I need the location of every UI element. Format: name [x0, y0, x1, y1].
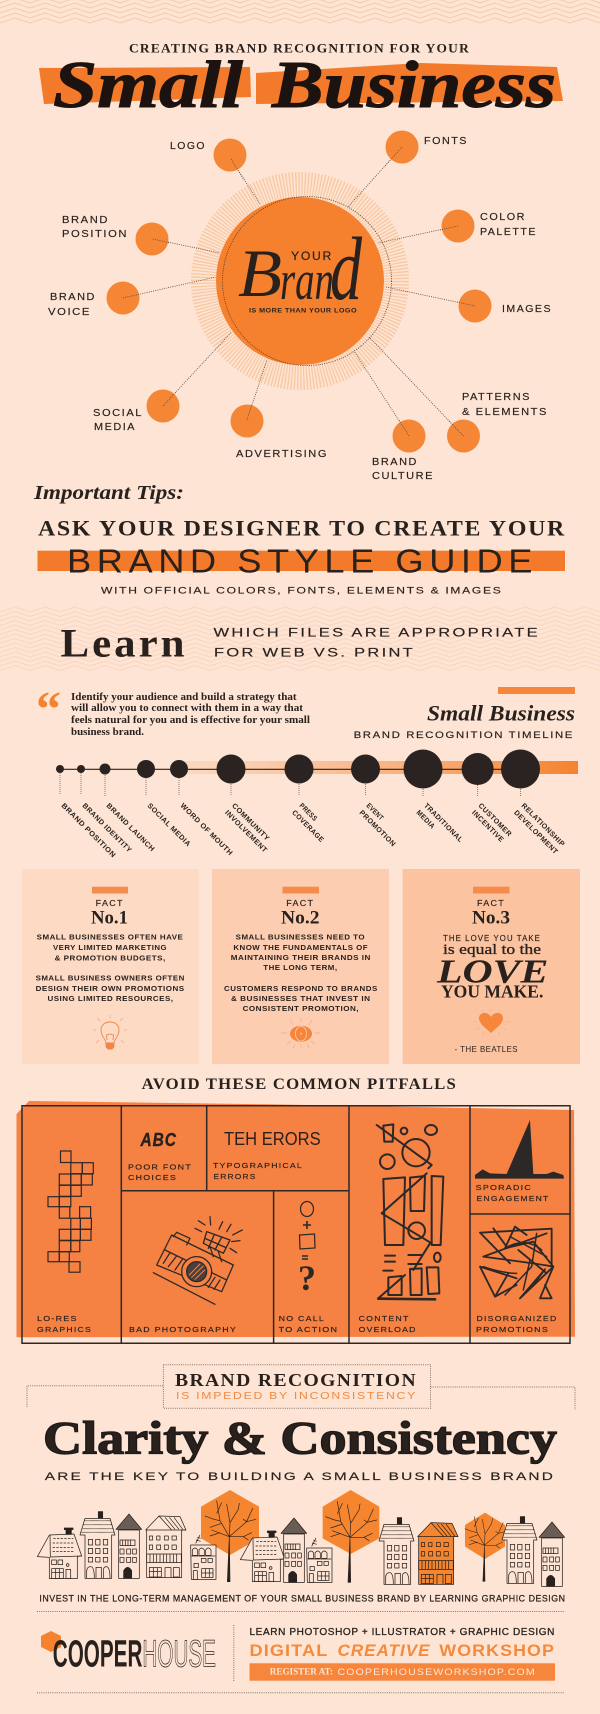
- hub heading brand: B: [238, 235, 282, 311]
- workshop title: CREATIVE: [338, 1641, 430, 1660]
- orange bar: [38, 551, 565, 571]
- accent bar: [498, 687, 575, 694]
- spoke labels: COLOR: [480, 212, 526, 223]
- hub heading your: YOUR: [291, 249, 333, 263]
- label: poor font: [128, 1162, 192, 1182]
- workshop title: DIGITAL: [250, 1641, 328, 1660]
- style guide tip: [38, 516, 566, 596]
- sunburst ring: [204, 184, 396, 378]
- label: disorganized: PROMOTIONS: [476, 1325, 549, 1334]
- label: content overload: OVERLOAD: [359, 1325, 417, 1334]
- fact body: & PROMOTION BUDGETS,: [55, 953, 166, 962]
- quote block: [36, 680, 310, 738]
- panel: fact 3: [403, 869, 580, 1064]
- panel: fact 1: [22, 869, 199, 1064]
- fact body: KNOW THE FUNDAMENTALS OF: [233, 943, 368, 952]
- icon: heart: [473, 1009, 509, 1035]
- learn callout: [60, 621, 540, 666]
- icon: camera: [153, 1217, 242, 1304]
- card background: [22, 869, 199, 1064]
- label: poor font: POOR FONT: [128, 1162, 192, 1171]
- label: bad photography: BAD PHOTOGRAPHY: [129, 1325, 237, 1334]
- quote paragraph: feels natural for you and is effective for your small: [71, 715, 310, 726]
- clarity subheading: ARE THE KEY TO BUILDING A SMALL BUSINESS BRAND: [45, 1471, 555, 1483]
- orange band: [185, 761, 578, 774]
- brand recognition timeline: [56, 750, 578, 859]
- orange house: [418, 1523, 458, 1584]
- icon: lo-res graphics: [48, 1151, 93, 1272]
- love quote: [436, 933, 548, 1002]
- label: lo-res: [37, 1314, 92, 1334]
- rotated milestone labels: MEDIA: [415, 808, 437, 831]
- label: poor font: CHOICES: [128, 1173, 177, 1182]
- central circle: [216, 197, 384, 365]
- logo wordmark house: HOUSE: [142, 1634, 216, 1676]
- label: typographical: [213, 1161, 303, 1181]
- rotated milestone labels: INVOLVEMENT: [223, 808, 270, 855]
- quote paragraph: will allow you to connect with them in a way that: [71, 703, 304, 714]
- quote attribution: - THE BEATLES: [455, 1044, 518, 1054]
- label: lo-res: LO-RES: [37, 1314, 78, 1323]
- rotated milestone labels: INCENTIVE: [470, 808, 506, 844]
- spoke labels: LOGO: [170, 141, 206, 152]
- quote paragraph: [71, 692, 310, 738]
- accent tab: [92, 887, 128, 894]
- drop lines: [60, 773, 520, 796]
- satellite circles: [106, 130, 492, 452]
- rotated milestone labels: BRAND LAUNCH: [105, 801, 157, 853]
- hub caption: IS MORE THAN YOUR LOGO: [249, 308, 357, 314]
- dotted frame: [27, 1365, 575, 1410]
- label: no call: NO CALL: [279, 1314, 325, 1323]
- register label: REGISTER AT:: [270, 1667, 333, 1677]
- pitfalls heading: AVOID THESE COMMON PITFALLS: [142, 1076, 457, 1093]
- title strip right: [256, 63, 563, 104]
- rotated milestone labels: WORD OF MOUTH: [179, 801, 235, 857]
- subtitle: CREATING BRAND RECOGNITION FOR YOUR: [129, 40, 470, 56]
- grid frame: [22, 1106, 570, 1343]
- love quote: THE LOVE YOU TAKE: [443, 933, 541, 943]
- important tips heading: Important Tips:: [33, 482, 184, 504]
- workshop promo: [250, 1626, 555, 1681]
- title text Small: Small: [53, 48, 243, 122]
- icon: disorganized tangle: [480, 1227, 553, 1298]
- axis line: [60, 768, 510, 770]
- love quote: LOVE: [436, 954, 548, 991]
- spoke labels: POSITION: [62, 229, 128, 240]
- brand style guide text: BRAND STYLE GUIDE: [67, 542, 538, 580]
- invest caption: INVEST IN THE LONG-TERM MANAGEMENT OF YOUR SMALL BUSINESS BRAND BY LEARNING GRAPHIC DESIGN: [39, 1594, 566, 1605]
- hub heading brand: ran: [280, 250, 334, 312]
- card background: [403, 869, 580, 1064]
- fact body: USING LIMITED RESOURCES,: [48, 994, 174, 1003]
- learn callout: FOR WEB VS. PRINT: [214, 646, 415, 660]
- register bar: [250, 1663, 555, 1681]
- learn description: WHICH FILES ARE APPROPRIATE: [214, 626, 540, 640]
- label: disorganized: DISORGANIZED: [476, 1314, 558, 1323]
- card background: [212, 869, 389, 1064]
- tree 1: [205, 1501, 256, 1582]
- fact body: SMALL BUSINESS OWNERS OFTEN: [36, 973, 185, 982]
- rotated milestone labels: COVERAGE: [290, 808, 326, 844]
- label: disorganized: [476, 1314, 558, 1334]
- label: sporadic: [476, 1183, 550, 1203]
- footer divider lines: [37, 1612, 564, 1693]
- icon: no call equation: ?: [298, 1258, 316, 1298]
- label: typographical: ERRORS: [214, 1172, 256, 1181]
- spoke labels: SOCIAL: [93, 408, 143, 419]
- spoke labels: MEDIA: [94, 422, 136, 433]
- spoke labels: IMAGES: [502, 304, 552, 315]
- fact body: MAINTAINING THEIR BRANDS IN: [231, 953, 371, 962]
- fact body: DESIGN THEIR OWN PROMOTIONS: [36, 984, 185, 993]
- workshop title: WORKSHOP: [439, 1641, 555, 1660]
- label: typographical: TYPOGRAPHICAL: [213, 1161, 303, 1170]
- rotated milestone labels: BRAND IDENTITY: [81, 801, 134, 854]
- fact number: No.3: [472, 907, 510, 928]
- quote paragraph: business brand.: [71, 727, 144, 738]
- banner heading: BRAND RECOGNITION: [175, 1370, 417, 1390]
- logo hexagon: [41, 1631, 61, 1652]
- fact label: FACT: [286, 898, 314, 908]
- workshop title: [250, 1641, 555, 1660]
- label: sporadic: ENGAGEMENT: [476, 1194, 550, 1203]
- tree hexagon 2: [323, 1490, 379, 1554]
- clarity and consistency heading: Clarity & Consistency: [43, 1412, 558, 1464]
- spoke labels: FONTS: [424, 136, 468, 147]
- rotated milestone labels: RELATIONSHIP: [520, 801, 567, 848]
- illustration: houses and trees: [37, 1490, 565, 1586]
- top chevron pattern: [0, 0, 600, 23]
- accent tab: [473, 887, 510, 894]
- fact body: CUSTOMERS RESPOND TO BRANDS: [224, 984, 378, 993]
- fact body: CONSISTENT PROMOTION,: [243, 1004, 359, 1013]
- icon: sporadic spike chart: [475, 1120, 564, 1179]
- promo line: LEARN PHOTOSHOP + ILLUSTRATOR + GRAPHIC DESIGN: [250, 1626, 555, 1638]
- timeline subtitle: BRAND RECOGNITION TIMELINE: [354, 730, 574, 740]
- rotated milestone labels: EVENT: [365, 801, 386, 822]
- fact body: VERY LIMITED MARKETING: [53, 943, 167, 952]
- rotated milestone labels: CUSTOMER: [477, 801, 514, 839]
- rotated milestone labels: PROMOTION: [358, 808, 398, 848]
- love quote: is equal to the: [443, 942, 541, 958]
- icon: teh erors: TEH ERORS: [224, 1129, 321, 1149]
- brand hub diagram: [48, 130, 552, 482]
- icon: ABC: ABC: [140, 1130, 177, 1150]
- register url: COOPERHOUSEWORKSHOP.COM: [338, 1667, 536, 1678]
- tree hexagon 3: [465, 1513, 505, 1559]
- accent tab: [282, 887, 319, 894]
- label: content overload: [359, 1314, 417, 1334]
- spoke labels: & ELEMENTS: [462, 407, 548, 418]
- hub heading brand: [238, 220, 363, 319]
- fact number: No.2: [281, 907, 320, 928]
- label: content overload: CONTENT: [359, 1314, 410, 1323]
- spoke labels: CULTURE: [372, 471, 434, 482]
- rotated milestone labels: TRADITIONAL: [422, 801, 465, 844]
- quote mark: “: [36, 680, 61, 736]
- rotated milestone labels: PRESS: [298, 801, 320, 823]
- rotated milestone labels: [60, 801, 567, 859]
- fact body: [224, 932, 378, 1013]
- fact body: & BUSINESSES THAT INVEST IN: [231, 994, 370, 1003]
- chevron band: [0, 607, 600, 670]
- title strip left: [39, 67, 251, 104]
- panel: fact 2: [212, 869, 389, 1064]
- tree 2: [326, 1501, 377, 1582]
- title text Business: Business: [271, 48, 556, 122]
- tip heading: ASK YOUR DESIGNER TO CREATE YOUR: [38, 516, 566, 541]
- timeline header: [354, 687, 575, 740]
- dotted offset ring: [222, 196, 392, 366]
- panel: pitfalls grid: [16, 1101, 575, 1343]
- quote paragraph: Identify your audience and build a strategy that: [71, 692, 297, 703]
- fact number: No.1: [91, 907, 128, 928]
- label: lo-res: GRAPHICS: [37, 1325, 92, 1334]
- tree hexagon 1: [201, 1490, 259, 1555]
- fact body: SMALL BUSINESSES OFTEN HAVE: [37, 932, 183, 941]
- fact label: FACT: [477, 898, 505, 908]
- spoke labels: VOICE: [48, 307, 91, 318]
- logo: cooperhouse: [41, 1631, 216, 1676]
- banner subheading: IS IMPEDED BY INCONSISTENCY: [176, 1390, 417, 1402]
- hub heading brand: d: [330, 220, 363, 319]
- love quote: YOU MAKE.: [441, 982, 543, 1002]
- spoke labels: BRAND: [372, 457, 418, 468]
- icon: eye: [281, 1018, 320, 1049]
- timeline title: Small Business: [427, 700, 575, 726]
- connector lines: [123, 147, 475, 436]
- fact body: [36, 932, 185, 1003]
- timeline dots: [56, 750, 540, 788]
- title: [39, 40, 563, 122]
- fact body: THE LONG TERM,: [263, 963, 338, 972]
- spoke labels: BRAND: [50, 292, 96, 303]
- orange background: [16, 1101, 575, 1337]
- spoke labels: ADVERTISING: [236, 449, 328, 460]
- houses row one: [37, 1512, 565, 1586]
- fact body: SMALL BUSINESSES NEED TO: [236, 932, 365, 941]
- spoke labels: [48, 136, 552, 482]
- rotated milestone labels: BRAND POSITION: [60, 801, 118, 859]
- brand recognition banner: [27, 1365, 575, 1410]
- learn word: Learn: [60, 621, 188, 666]
- spoke labels: PATTERNS: [462, 392, 531, 403]
- tree 3: [465, 1517, 506, 1581]
- rotated milestone labels: COMMUNITY: [230, 801, 272, 843]
- rotated milestone labels: SOCIAL MEDIA: [146, 801, 193, 848]
- fact label: FACT: [96, 898, 124, 908]
- rotated milestone labels: DEVELOPMENT: [512, 808, 560, 856]
- icon: light bulb: [93, 1015, 127, 1049]
- spoke labels: BRAND: [62, 215, 109, 226]
- label: no call: [279, 1314, 338, 1334]
- connector dots over circles: [123, 147, 475, 436]
- logo wordmark cooper: COOPER: [53, 1634, 142, 1676]
- spoke labels: PALETTE: [480, 227, 537, 238]
- label: no call: TO ACTION: [279, 1325, 338, 1334]
- icon: no call equation: [298, 1202, 316, 1298]
- tip caption: WITH OFFICIAL COLORS, FONTS, ELEMENTS & IMAGES: [101, 585, 502, 596]
- label: sporadic: SPORADIC: [476, 1183, 532, 1192]
- icon: content overload: [377, 1124, 443, 1299]
